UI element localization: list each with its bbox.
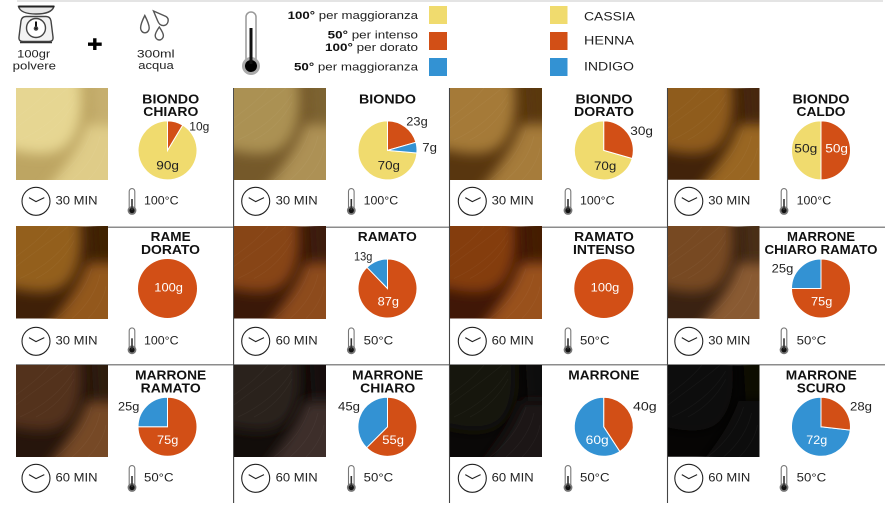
temperature: 100°C xyxy=(144,335,178,347)
hair swatch xyxy=(0,196,141,352)
panel: Marrone Scuro xyxy=(638,335,872,492)
powder legend xyxy=(550,6,635,76)
pie labels: 50g xyxy=(825,143,848,155)
hair swatch xyxy=(0,335,141,490)
text: 300ml acqua xyxy=(137,48,175,72)
icon: large thermometer xyxy=(242,12,260,75)
panel: Marrone Ramato xyxy=(0,335,206,492)
icon: thermometer xyxy=(564,466,572,492)
title: CHIARO xyxy=(143,105,199,119)
icon: clock xyxy=(458,187,486,215)
icon: clock xyxy=(22,464,50,492)
icon: clock xyxy=(242,187,270,215)
time: 60 MIN xyxy=(492,473,534,485)
icon: thermometer xyxy=(564,328,572,354)
time: 60 MIN xyxy=(492,335,534,347)
time: 30 MIN xyxy=(708,335,750,347)
pie labels xyxy=(594,126,653,173)
title: BIONDO xyxy=(142,92,200,106)
title: INTENSO xyxy=(573,243,635,257)
title: MARRONE xyxy=(352,369,423,383)
panel: Marrone Chiaro Ramato xyxy=(638,197,878,355)
temperature: 50°C xyxy=(364,473,393,485)
temperature: 50°C xyxy=(797,335,826,347)
legend row: 50 intense, 100 golden: 50° per intenso xyxy=(328,29,418,41)
time: 30 MIN xyxy=(708,196,750,208)
title xyxy=(135,369,206,396)
pie chart xyxy=(138,121,197,180)
pie labels: 13g xyxy=(354,251,372,263)
panel: Biondo Chiaro xyxy=(0,58,209,215)
icon: thermometer xyxy=(128,189,136,215)
title: CHIARO xyxy=(360,382,415,396)
icon: clock xyxy=(458,327,486,355)
text: 300ml acqua: acqua xyxy=(138,60,175,72)
pie labels: 60g xyxy=(586,435,609,447)
pie label: 100g xyxy=(591,282,619,294)
time: 30 MIN xyxy=(56,335,98,347)
hair swatch xyxy=(0,58,141,213)
time: 30 MIN xyxy=(56,196,98,208)
icon: clock xyxy=(22,327,50,355)
pie labels: 45g xyxy=(338,402,360,414)
pie chart xyxy=(358,397,417,456)
title: CHIARO RAMATO xyxy=(764,243,878,257)
legend row: 50 intense, 100 golden: 100° per dorato xyxy=(325,42,418,54)
pie labels xyxy=(378,117,437,173)
title xyxy=(792,92,850,119)
hair swatch xyxy=(638,58,792,213)
pie labels: 90g xyxy=(156,161,179,173)
icon: clock xyxy=(22,187,50,215)
legend row: 50 majority xyxy=(294,58,447,76)
hair swatch xyxy=(420,335,575,490)
title: DORATO xyxy=(574,105,634,119)
title xyxy=(573,230,635,257)
pie chart xyxy=(792,259,850,318)
grid lines xyxy=(16,88,885,503)
icon: clock xyxy=(675,327,703,355)
legend row: 100 majority xyxy=(288,6,447,24)
pie chart xyxy=(358,121,417,180)
pie chart xyxy=(574,259,633,318)
hair swatch xyxy=(420,58,575,213)
icon: clock xyxy=(675,187,703,215)
hair swatch xyxy=(204,335,359,490)
pie labels xyxy=(586,402,657,447)
temperature: 50°C xyxy=(580,335,610,347)
pie labels xyxy=(338,402,404,447)
temperature: 50°C xyxy=(364,335,393,347)
text: 300ml acqua: 300ml xyxy=(137,48,175,60)
title xyxy=(141,230,200,257)
icon: thermometer xyxy=(347,466,356,492)
header: water dose xyxy=(137,11,175,72)
icon: thermometer xyxy=(780,466,788,492)
hair swatch xyxy=(204,58,359,213)
pie labels xyxy=(794,143,848,155)
icon: thermometer xyxy=(128,466,136,492)
pie chart xyxy=(792,121,850,180)
pie labels xyxy=(156,121,209,173)
legend row: 50 majority: 50° per maggioranza xyxy=(294,62,419,74)
pie chart xyxy=(574,397,633,456)
plus sign xyxy=(88,38,102,50)
icon: clock xyxy=(458,464,486,492)
pie chart xyxy=(138,259,197,318)
title: MARRONE xyxy=(787,230,855,244)
title: MARRONE xyxy=(135,369,206,383)
legend: indigo: INDIGO xyxy=(584,60,634,74)
title: MARRONE xyxy=(786,369,857,383)
pie labels: 40g xyxy=(633,402,657,414)
pie labels: 28g xyxy=(850,402,872,414)
time: 60 MIN xyxy=(56,473,98,485)
pie chart xyxy=(791,397,850,456)
text: 100gr polvere: 100gr xyxy=(17,48,51,60)
panel: Ramato Intenso xyxy=(420,196,635,355)
pie labels xyxy=(118,402,178,447)
pie labels: 55g xyxy=(382,435,404,447)
panel: Rame Dorato xyxy=(0,196,200,355)
pie labels xyxy=(806,402,872,447)
title xyxy=(142,92,200,119)
title: SCURO xyxy=(797,382,846,396)
pie labels: 70g xyxy=(378,161,400,173)
hair swatch xyxy=(420,196,575,352)
pie labels: 7g xyxy=(422,143,437,155)
panel: Ramato xyxy=(204,196,417,355)
icon: thermometer xyxy=(564,189,572,215)
pie labels: 23g xyxy=(406,117,428,129)
pie labels: 10g xyxy=(189,121,209,133)
title: BIONDO xyxy=(576,92,633,106)
icon: water drops xyxy=(141,11,168,40)
time: 60 MIN xyxy=(708,473,750,485)
panel: Marrone Chiaro xyxy=(204,335,423,492)
icon: thermometer xyxy=(128,328,136,354)
pie labels: 25g xyxy=(118,402,139,414)
icon: thermometer xyxy=(347,328,356,354)
icon: clock xyxy=(242,327,270,355)
pie chart xyxy=(138,397,197,456)
temperature: 100°C xyxy=(580,196,614,208)
title: RAME xyxy=(151,230,191,244)
legend row: 100 majority: 100° per maggioranza xyxy=(288,10,419,22)
time: 60 MIN xyxy=(276,335,318,347)
legend row: 50 intense, 100 golden xyxy=(325,29,447,54)
panel: Marrone xyxy=(420,335,657,492)
title: BIONDO xyxy=(792,92,850,106)
panel: Biondo Caldo xyxy=(638,58,850,215)
pie labels: 87g xyxy=(378,297,399,309)
pie label: 100g xyxy=(154,282,183,294)
panel: Biondo xyxy=(204,58,437,215)
title: MARRONE xyxy=(568,369,639,383)
pie labels: 72g xyxy=(806,435,827,447)
pie labels: 25g xyxy=(772,263,793,275)
pie labels: 75g xyxy=(157,435,178,447)
pie chart xyxy=(574,121,633,180)
legend: henna: HENNA xyxy=(584,34,634,48)
hair swatch xyxy=(204,196,359,352)
temperature: 50°C xyxy=(797,473,826,485)
title: CALDO xyxy=(796,105,846,119)
icon: clock xyxy=(242,464,270,492)
title xyxy=(574,92,634,119)
pie labels: 30g xyxy=(630,126,653,138)
pie labels: 70g xyxy=(594,161,616,173)
legend: cassia: CASSIA xyxy=(584,10,635,24)
title: DORATO xyxy=(141,243,200,257)
pie chart xyxy=(358,259,417,318)
panel: Biondo Dorato xyxy=(420,58,653,215)
title: BIONDO xyxy=(359,92,416,106)
pie labels: 50g xyxy=(794,143,817,155)
title xyxy=(352,369,423,396)
time: 30 MIN xyxy=(492,196,534,208)
temperature: 50°C xyxy=(580,473,610,485)
icon: thermometer xyxy=(780,328,788,354)
text: 100gr polvere xyxy=(13,48,56,72)
hair swatch xyxy=(638,335,792,490)
text: 100gr polvere: polvere xyxy=(13,60,56,72)
temperature: 50°C xyxy=(144,473,174,485)
temperature: 100°C xyxy=(144,196,178,208)
pie labels xyxy=(772,263,832,309)
title xyxy=(786,369,857,396)
icon: kitchen scale xyxy=(18,6,54,42)
title: RAMATO xyxy=(141,382,201,396)
header: powder dose xyxy=(13,6,56,72)
temperature legend xyxy=(288,6,447,76)
icon: clock xyxy=(675,464,703,492)
title xyxy=(764,230,878,257)
pie labels: 75g xyxy=(811,297,832,309)
time: 30 MIN xyxy=(276,196,318,208)
time: 60 MIN xyxy=(276,473,318,485)
top bar xyxy=(17,0,883,2)
hair swatch xyxy=(638,197,792,351)
title: RAMATO xyxy=(358,230,417,244)
pie labels xyxy=(354,251,399,309)
icon: thermometer xyxy=(347,189,356,215)
temperature: 100°C xyxy=(797,196,831,208)
icon: thermometer xyxy=(780,189,788,215)
title: RAMATO xyxy=(574,230,634,244)
temperature: 100°C xyxy=(364,196,398,208)
